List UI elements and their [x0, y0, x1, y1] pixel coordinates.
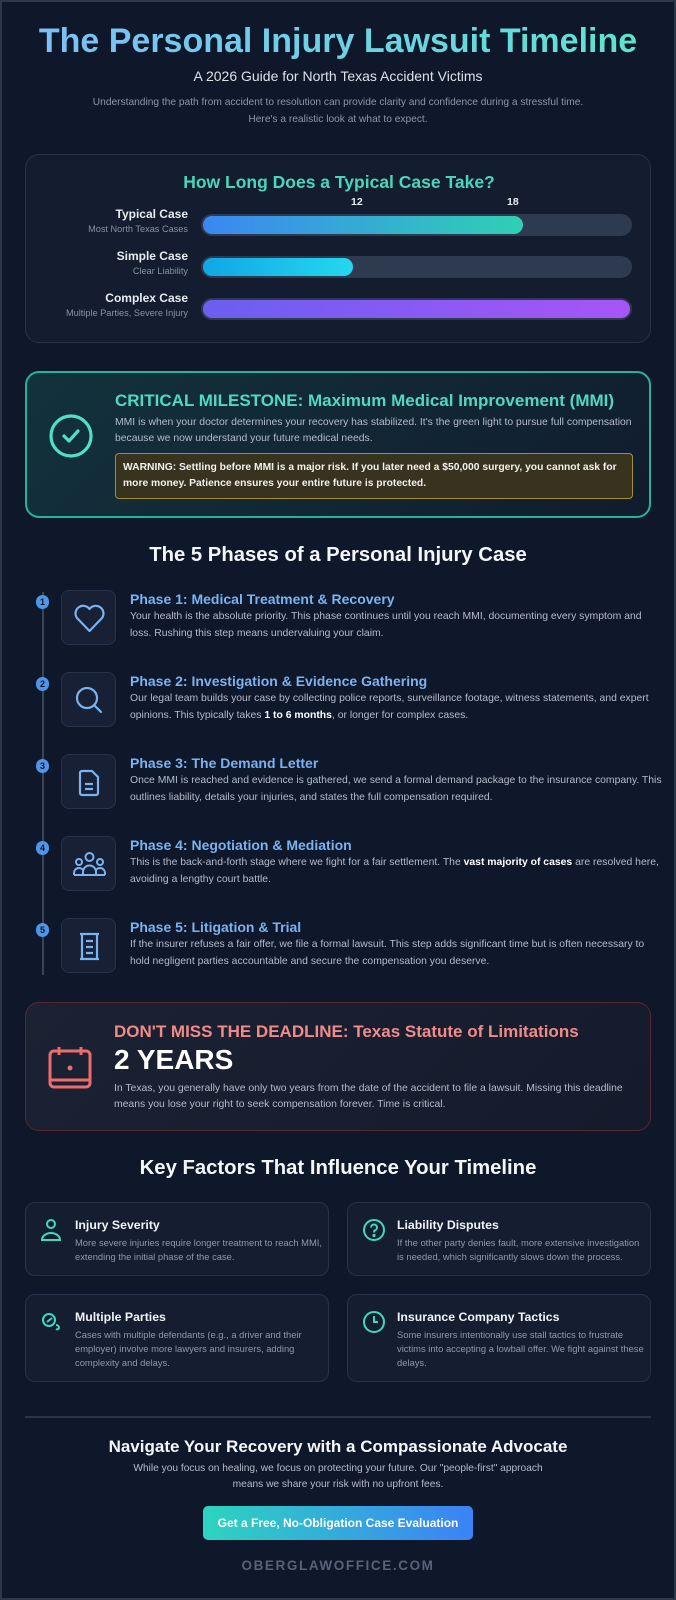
icon: calendar: [48, 1047, 92, 1088]
phase 2: 2: [40, 679, 45, 689]
panel: case duration chart: Simple Case: [117, 249, 188, 263]
bar: simple: [117, 249, 632, 278]
phase 1: 1: [40, 597, 45, 607]
icon: clock: [363, 1311, 385, 1333]
phase 1: [36, 590, 642, 645]
panel: MMI milestone: [25, 371, 651, 518]
intro text: Here's a realistic look at what to expect.: [248, 114, 428, 124]
month markers: 12: [351, 196, 363, 208]
intro text: Understanding the path from accident to resolution can provide clarity and confidence during a stressful time.: [93, 97, 583, 108]
phase 2: [36, 672, 649, 727]
card: injury severity: Injury Severity: [75, 1218, 160, 1232]
card: injury severity: [25, 1202, 329, 1276]
title: The Personal Injury Lawsuit Timeline: [39, 22, 637, 60]
icon: parties: [42, 1313, 60, 1330]
panel: case duration chart: 18: [507, 196, 519, 208]
footer text: means we share your risk with no upfront fees.: [233, 1479, 443, 1490]
phase 5: Phase 5: Litigation & Trial: [130, 919, 301, 935]
timeline line: [42, 592, 44, 975]
chart heading: How Long Does a Typical Case Take?: [183, 172, 495, 192]
warning box: WARNING: Settling before MMI is a major risk. If you later need a $50,000 surgery, you cannot ask for more money. Patience ensures your entire future is protected.: [123, 462, 617, 489]
MMI text: MMI is when your doctor determines your recovery has stabilized. It's the green light to pursue full compensation because we now understand your future medical needs.: [115, 417, 632, 444]
phase 5: 5: [40, 925, 45, 935]
phase 1: Phase 1: Medical Treatment & Recovery: [130, 591, 395, 607]
card: insurance tactics: [347, 1294, 651, 1382]
key factors heading: Key Factors That Influence Your Timeline: [140, 1157, 536, 1179]
icon: heart: [61, 590, 116, 645]
phase 2: opinions. This typically takes 1 to 6 months, or longer for complex cases.: [130, 710, 468, 720]
bar: typical: Most North Texas Cases: [88, 224, 188, 234]
card: liability disputes: Liability Disputes: [397, 1218, 499, 1232]
icon: document: [61, 754, 116, 809]
deadline heading: DON'T MISS THE DEADLINE: Texas Statute of Limitations: [114, 1022, 579, 1041]
icon: group: [61, 836, 116, 891]
CTA button: Get a Free, No-Obligation Case Evaluation: [218, 1516, 458, 1530]
2 years: 2 YEARS: [114, 1044, 233, 1075]
warning box: [115, 453, 633, 499]
icon: question: [363, 1219, 385, 1241]
card: insurance tactics: Some insurers intentionally use stall tactics to frustrate victims into accepting a lowball offer. We fight against these delays.: [397, 1329, 644, 1368]
card: liability disputes: [347, 1202, 651, 1276]
phase 4: [36, 836, 659, 891]
phase 3: 3: [40, 761, 45, 771]
card: multiple parties: [25, 1294, 329, 1382]
icon: magnifier: [61, 672, 116, 727]
panel: case duration chart: Clear Liability: [133, 266, 188, 276]
icon: person: [41, 1219, 61, 1241]
phase 4: This is the back-and-forth stage where we fight for a fair settlement. The vast majority of cases are resolved here,: [130, 857, 659, 868]
icon: check circle: [49, 414, 93, 458]
bar: typical: Typical Case: [116, 207, 188, 221]
CTA button: [203, 1506, 473, 1540]
card: multiple parties: Cases with multiple defendants (e.g., a driver and their employer) involve more lawyers and insurers, adding complexity and delays.: [75, 1329, 302, 1368]
card: liability disputes: If the other party denies fault, more extensive investigation is needed, which significantly slows down the process.: [397, 1237, 639, 1262]
phase 4: avoiding a lengthy court battle.: [130, 874, 271, 884]
phase 5: hold negligent parties accountable and secure the compensation you deserve.: [130, 956, 489, 966]
footer heading: Navigate Your Recovery with a Compassionate Advocate: [109, 1437, 567, 1456]
card: injury severity: More severe injuries require longer treatment to reach MMI, extending the initial phase of the case.: [75, 1237, 322, 1262]
bar: typical: [88, 207, 632, 236]
phase 3: Phase 3: The Demand Letter: [130, 755, 318, 771]
phase 5: [36, 918, 644, 973]
intro text: [93, 97, 583, 124]
card: insurance tactics: Insurance Company Tactics: [397, 1310, 559, 1324]
card: multiple parties: Multiple Parties: [75, 1310, 166, 1324]
panel: statute of limitations: [25, 1002, 651, 1131]
phases heading: The 5 Phases of a Personal Injury Case: [149, 544, 527, 566]
phase 3: outlines liability, details your injuries, and states the full compensation required.: [130, 792, 493, 802]
phase 4: Phase 4: Negotiation & Mediation: [130, 837, 352, 853]
footer text: While you focus on healing, we focus on protecting your future. Our "people-first" approach: [133, 1463, 543, 1474]
phase 2: Phase 2: Investigation & Evidence Gathering: [130, 673, 427, 689]
deadline text: In Texas, you generally have only two years from the date of the accident to file a lawsuit. Missing this deadline means you lose your right to seek compensation forever. Time is critical.: [114, 1083, 623, 1110]
phase 4: 4: [40, 843, 45, 853]
phase 2: Our legal team builds your case by collecting police reports, surveillance footage, witness statements, and expert: [130, 693, 649, 704]
phase 5: If the insurer refuses a fair offer, we file a formal lawsuit. This step adds significant time but is often necessary to: [130, 939, 644, 950]
subtitle: A 2026 Guide for North Texas Accident Victims: [194, 68, 482, 84]
panel: case duration chart: Multiple Parties, Severe Injury: [66, 308, 188, 318]
panel: case duration chart: [25, 154, 651, 343]
phase 3: [36, 754, 662, 809]
bar: complex: [66, 291, 632, 320]
website: OBERGLAWOFFICE.COM: [241, 1558, 435, 1573]
phase 3: Once MMI is reached and evidence is gathered, we send a formal demand package to the insurance company. This: [130, 775, 662, 786]
panel: case duration chart: Complex Case: [105, 291, 188, 305]
icon: court document: [61, 918, 116, 973]
footer text: [133, 1463, 543, 1490]
phase 1: Your health is the absolute priority. This phase continues until you reach MMI, documenting every symptom and: [130, 611, 642, 622]
MMI heading: CRITICAL MILESTONE: Maximum Medical Improvement (MMI): [115, 391, 614, 410]
phase 1: loss. Rushing this step means undervaluing your claim.: [130, 628, 384, 638]
